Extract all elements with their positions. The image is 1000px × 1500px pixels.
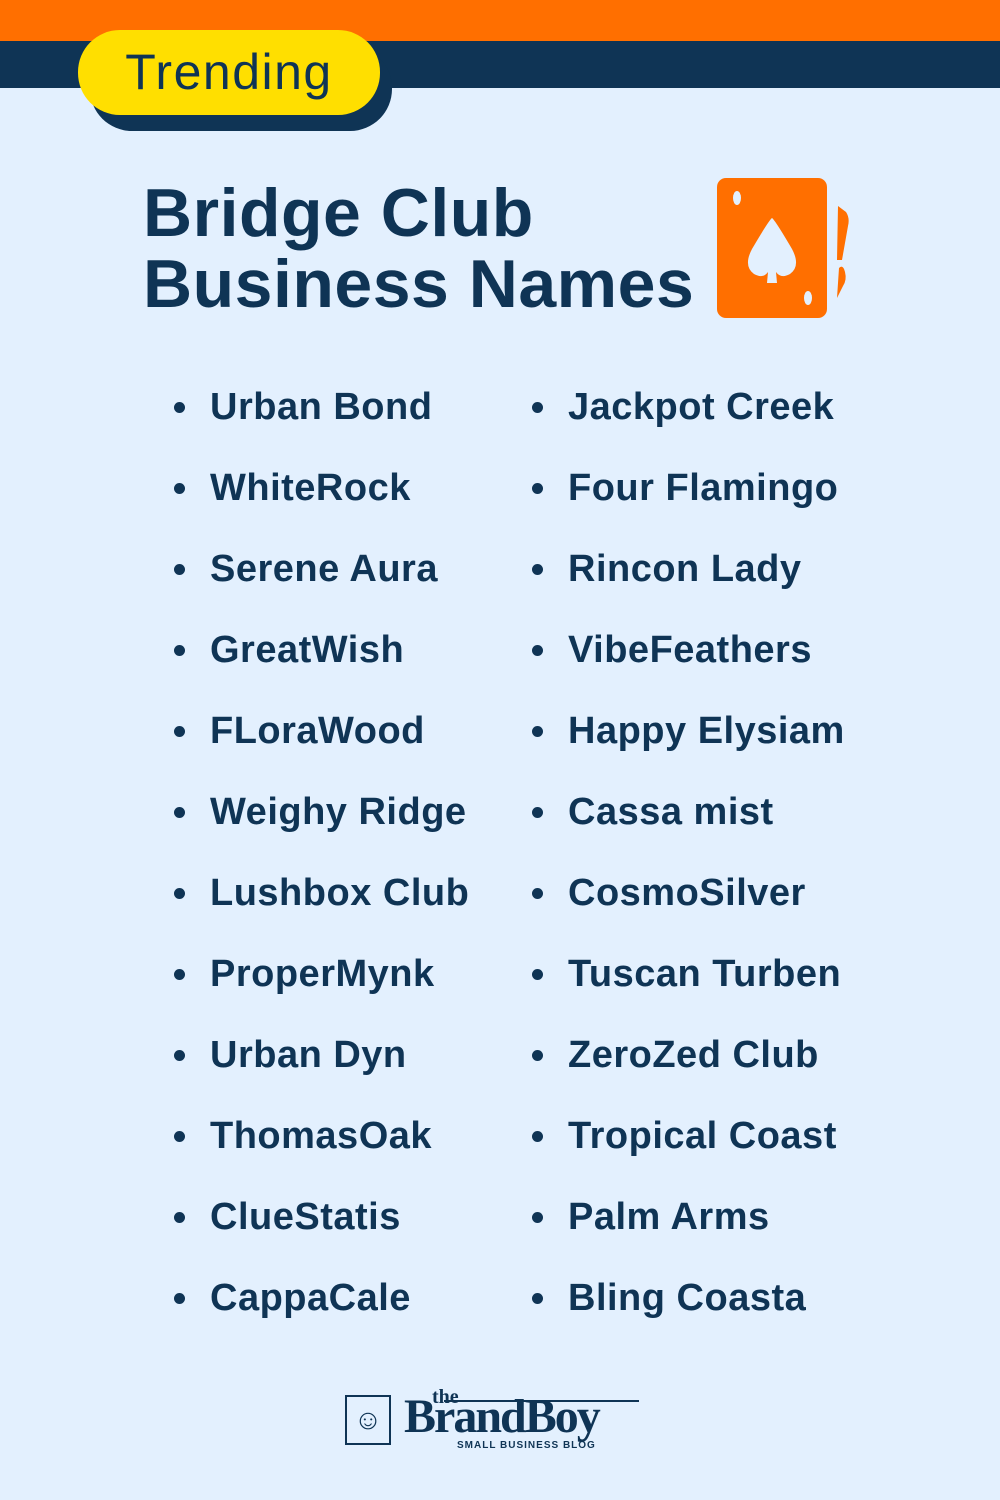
title: Business Names (143, 246, 694, 322)
list: left column: Urban Bond (210, 386, 432, 428)
logo: the BrandBoy: BrandBoy (404, 1390, 599, 1443)
list: right column: VibeFeathers (568, 629, 812, 671)
icon: playing card spade (717, 178, 849, 318)
list: right column (532, 386, 845, 1319)
list: right column: Four Flamingo (568, 467, 838, 509)
top orange bar (0, 0, 1000, 41)
list: right column: Cassa mist (568, 791, 774, 833)
list: left column: CappaCale (210, 1277, 411, 1319)
list: left column: ClueStatis (210, 1196, 401, 1238)
list: left column: GreatWish (210, 629, 404, 671)
logo: the BrandBoy: the (432, 1386, 459, 1408)
badge label (78, 30, 380, 115)
list: right column: ZeroZed Club (568, 1034, 819, 1076)
list: left column: Lushbox Club (210, 872, 469, 914)
title: Bridge Club (143, 175, 534, 251)
navy band (0, 41, 1000, 88)
list: right column: Happy Elysiam (568, 710, 845, 752)
logo: the BrandBoy: SMALL BUSINESS BLOG (457, 1440, 596, 1451)
list: right column: Tropical Coast (568, 1115, 837, 1157)
logo: the BrandBoy (345, 1386, 639, 1451)
list: left column: Serene Aura (210, 548, 438, 590)
list: left column: ThomasOak (210, 1115, 432, 1157)
list: right column: CosmoSilver (568, 872, 806, 914)
list: left column: Weighy Ridge (210, 791, 467, 833)
list: left column: Urban Dyn (210, 1034, 407, 1076)
list: right column: Bling Coasta (568, 1277, 806, 1319)
list: right column: Rincon Lady (568, 548, 802, 590)
list: right column: Palm Arms (568, 1196, 770, 1238)
list: left column: WhiteRock (210, 467, 411, 509)
badge label: Trending (125, 44, 333, 100)
list: left column: FLoraWood (210, 710, 425, 752)
list: left column (174, 386, 469, 1319)
logo icon (345, 1395, 391, 1445)
list: left column: ProperMynk (210, 953, 435, 995)
title (143, 175, 694, 322)
list: right column: Jackpot Creek (568, 386, 834, 428)
trending badge (78, 30, 392, 131)
logo icon: ☺ (354, 1404, 382, 1435)
list: right column: Tuscan Turben (568, 953, 841, 995)
